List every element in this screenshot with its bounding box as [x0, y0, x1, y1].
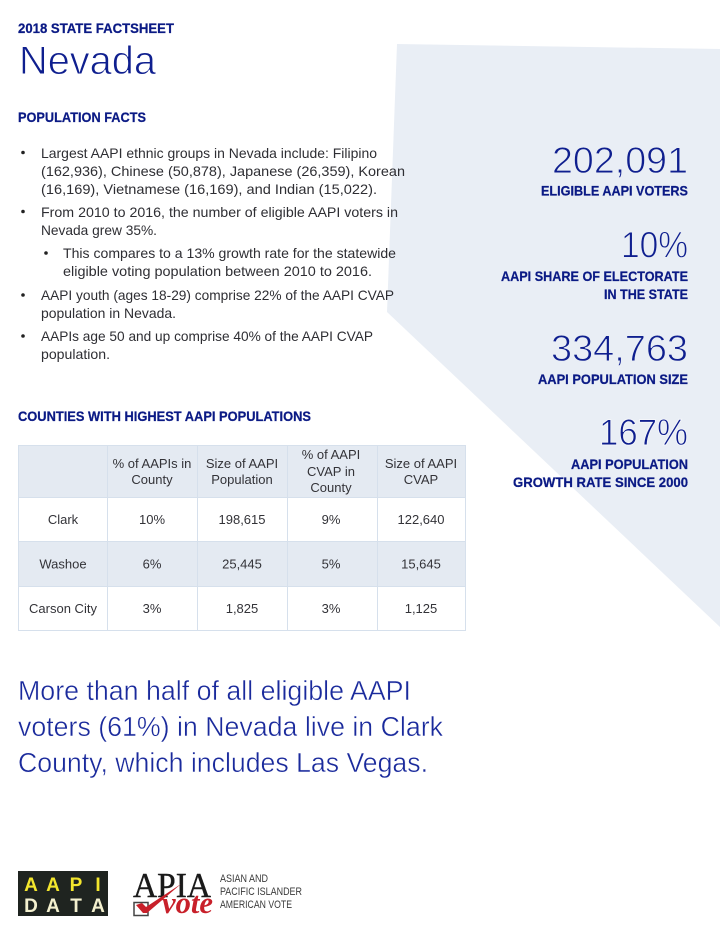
title: Nevada — [19, 39, 157, 83]
table row: Washoe — [39, 556, 441, 572]
heading: population facts: POPULATION FACTS — [18, 109, 146, 125]
bullet: AAPI youth — [21, 287, 394, 321]
bullet: eligible voter growth — [21, 204, 398, 238]
table header row: % of AAPIs in — [113, 456, 191, 471]
table row: Clark: 9% — [322, 512, 341, 527]
bullet: largest ethnic groups: (162,936), Chinese (50,878), Japanese (26,359), Korean — [41, 163, 405, 179]
table row: Clark: 122,640 — [398, 512, 444, 527]
callout: Clark County: County, which includes Las Vegas. — [18, 747, 428, 778]
bullet: eligible voter growth: Nevada grew 35%. — [41, 222, 157, 238]
logo: AAPI Data: A — [24, 875, 38, 896]
table row: Clark — [48, 512, 444, 527]
logo: APIA Vote: vote — [162, 885, 213, 920]
stat: population growth: 167% — [599, 412, 688, 453]
bullet: age 50 and up — [21, 328, 373, 362]
table header row: County — [310, 480, 352, 495]
logo: AAPI Data: A — [46, 875, 60, 896]
table row: Washoe: 5% — [322, 556, 341, 572]
table row: Clark: Clark — [48, 512, 79, 527]
bullet: eligible voter growth: From 2010 to 2016, the number of eligible AAPI voters in — [41, 204, 398, 220]
table row: Carson City: 1,825 — [226, 601, 258, 616]
stat: eligible voters: ELIGIBLE AAPI VOTERS — [541, 182, 688, 198]
table row: Clark: 198,615 — [218, 512, 266, 527]
panel: key statistics — [501, 140, 688, 490]
table row: Carson City: 3% — [322, 601, 341, 616]
stat: population growth: AAPI POPULATION — [571, 456, 688, 472]
logo: APIA Vote: APIA — [133, 866, 212, 905]
heading: counties table: COUNTIES WITH HIGHEST AAPI POPULATIONS — [18, 408, 311, 424]
header — [18, 20, 174, 83]
bullet: AAPI youth: population in Nevada. — [41, 305, 176, 321]
table header row: CVAP in — [307, 464, 355, 479]
stat: population growth — [513, 412, 688, 490]
table header row — [113, 447, 457, 495]
table: counties with highest AAPI populations — [18, 445, 466, 630]
table row: Washoe: 25,445 — [222, 556, 262, 572]
table row: Clark: 10% — [139, 512, 165, 527]
stat: share of electorate: IN THE STATE — [604, 286, 688, 302]
sub-bullet: statewide comparison: eligible voting population between 2010 to 2016. — [63, 263, 372, 279]
table row: Washoe: 15,645 — [401, 556, 441, 572]
background: Nevada state shape — [387, 44, 720, 627]
logo: APIA Vote — [133, 866, 302, 920]
text block: population facts bullets — [21, 145, 405, 362]
table row: Carson City: 1,125 — [405, 601, 437, 616]
bullet: AAPI youth: AAPI youth (ages 18-29) comprise 22% of the AAPI CVAP — [41, 287, 394, 303]
logo: AAPI Data: P — [70, 875, 83, 896]
stat: share of electorate — [501, 224, 688, 302]
bullet: age 50 and up: population. — [41, 346, 110, 362]
logo: AAPI Data — [18, 871, 108, 917]
bullet: largest ethnic groups — [21, 145, 405, 197]
stat: share of electorate: 10% — [621, 224, 688, 266]
table header row: County — [131, 472, 173, 487]
logo: APIA Vote: AMERICAN VOTE — [220, 899, 292, 911]
table header row: % of AAPI — [302, 447, 360, 462]
logo: AAPI Data: T — [70, 896, 82, 917]
table row: Carson City: Carson City — [29, 601, 97, 616]
bullet: age 50 and up: AAPIs age 50 and up comprise 40% of the AAPI CVAP — [41, 328, 373, 344]
callout: Clark County: voters (61%) in Nevada live in Clark — [18, 711, 444, 742]
stat: population size — [538, 328, 688, 387]
table row: Carson City — [29, 601, 437, 616]
bullet: largest ethnic groups: (16,169), Vietnamese (16,169), and Indian (15,022). — [41, 181, 377, 197]
header kicker: 2018 STATE FACTSHEET — [18, 20, 174, 36]
stat: eligible voters: 202,091 — [552, 140, 688, 181]
callout: Clark County — [18, 675, 444, 778]
bullet: largest ethnic groups: Largest AAPI ethnic groups in Nevada include: Filipino — [41, 145, 377, 161]
table row: Washoe: 6% — [143, 556, 162, 572]
table header row: CVAP — [404, 472, 438, 487]
logo: AAPI Data: D — [24, 896, 38, 917]
sub-bullet: statewide comparison — [44, 245, 396, 279]
callout: Clark County: More than half of all eligible AAPI — [18, 675, 411, 706]
logo: APIA Vote: PACIFIC ISLANDER — [220, 886, 302, 898]
stat: population growth: GROWTH RATE SINCE 2000 — [513, 474, 688, 490]
logo: AAPI Data: I — [95, 875, 101, 896]
table row: Washoe: Washoe — [39, 556, 87, 572]
stat: share of electorate: AAPI SHARE OF ELECTORATE — [501, 268, 688, 284]
table row: Carson City: 3% — [143, 601, 162, 616]
sub-bullet: statewide comparison: This compares to a 13% growth rate for the statewide — [63, 245, 396, 261]
stat: population size: AAPI POPULATION SIZE — [538, 371, 688, 387]
stat: eligible voters — [541, 140, 688, 198]
stat: population size: 334,763 — [551, 328, 688, 369]
logo: AAPI Data: A — [91, 896, 105, 917]
table header row: Size of AAPI — [385, 456, 457, 471]
table header row: Size of AAPI — [206, 456, 278, 471]
table header row: Population — [211, 472, 273, 487]
logo: APIA Vote: ASIAN AND — [220, 873, 268, 885]
logo: AAPI Data: A — [46, 896, 60, 917]
